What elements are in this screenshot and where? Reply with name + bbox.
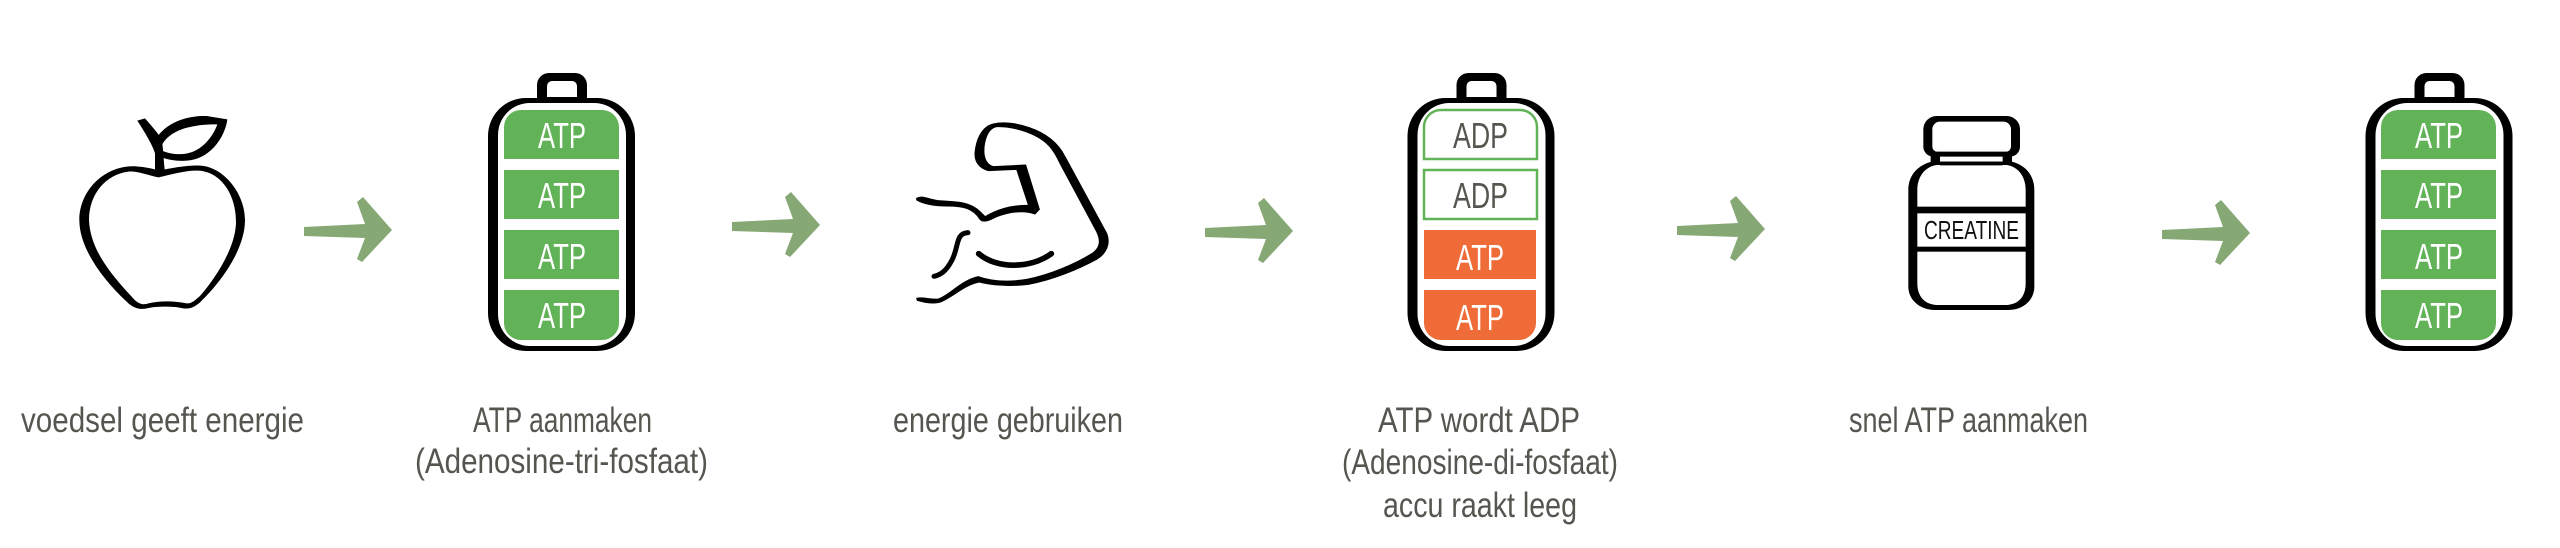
cell 2	[2381, 170, 2496, 219]
caption: ATP wordt ADP: ATP wordt ADP	[1378, 401, 1580, 440]
caption: energie gebruiken: energie gebruiken	[893, 401, 1123, 440]
cell 3: ATP	[538, 236, 586, 277]
cell 3	[2381, 230, 2496, 279]
cell ADP 1	[1424, 110, 1537, 159]
caption: ATP wordt ADP	[1342, 401, 1618, 525]
cell ADP 1: ADP	[1453, 115, 1508, 156]
icon: apple	[79, 116, 245, 309]
caption: ATP aanmaken	[415, 401, 708, 481]
arrow 1	[304, 197, 392, 262]
caption: voedsel geeft energie: voedsel geeft energie	[21, 401, 304, 440]
cell ATP orange 1: ATP	[1456, 237, 1504, 278]
cell 1: ATP	[538, 115, 586, 156]
cell 2: ATP	[538, 175, 586, 216]
bottle label: CREATINE	[1924, 215, 2019, 245]
caption: snel ATP aanmaken: snel ATP aanmaken	[1849, 401, 2088, 440]
arrow 3	[1205, 198, 1293, 263]
caption: ATP aanmaken: ATP aanmaken	[473, 401, 652, 440]
caption: ATP wordt ADP: accu raakt leeg	[1383, 486, 1577, 525]
cell 4	[2381, 290, 2496, 340]
icon: full battery 2	[2366, 73, 2512, 351]
cell ADP 2	[1424, 170, 1537, 219]
cell 4: ATP	[2415, 295, 2463, 336]
caption: ATP aanmaken: (Adenosine-tri-fosfaat)	[415, 442, 708, 481]
cell 1	[504, 110, 619, 159]
arrow 2	[732, 192, 820, 257]
cell 3: ATP	[2415, 236, 2463, 277]
cell ATP orange 2	[1424, 290, 1536, 340]
cell 1: ATP	[2415, 115, 2463, 156]
icon: flexed arm	[917, 123, 1108, 303]
cell 2: ATP	[2415, 175, 2463, 216]
cell 2	[504, 170, 619, 219]
cell 4: ATP	[538, 295, 586, 336]
cell ADP 2: ADP	[1453, 175, 1508, 216]
cell 1	[2381, 110, 2496, 159]
arrow 5	[2162, 200, 2250, 265]
cell ATP orange 2: ATP	[1456, 297, 1504, 338]
icon: half empty battery	[1408, 73, 1554, 351]
cell 3	[504, 230, 619, 279]
cell ATP orange 1	[1424, 230, 1536, 279]
arrow 4	[1677, 196, 1765, 261]
caption: ATP wordt ADP: (Adenosine-di-fosfaat)	[1342, 443, 1618, 482]
cell 4	[504, 290, 619, 340]
icon: full battery 1	[488, 73, 635, 351]
icon: creatine bottle	[1908, 116, 2034, 310]
